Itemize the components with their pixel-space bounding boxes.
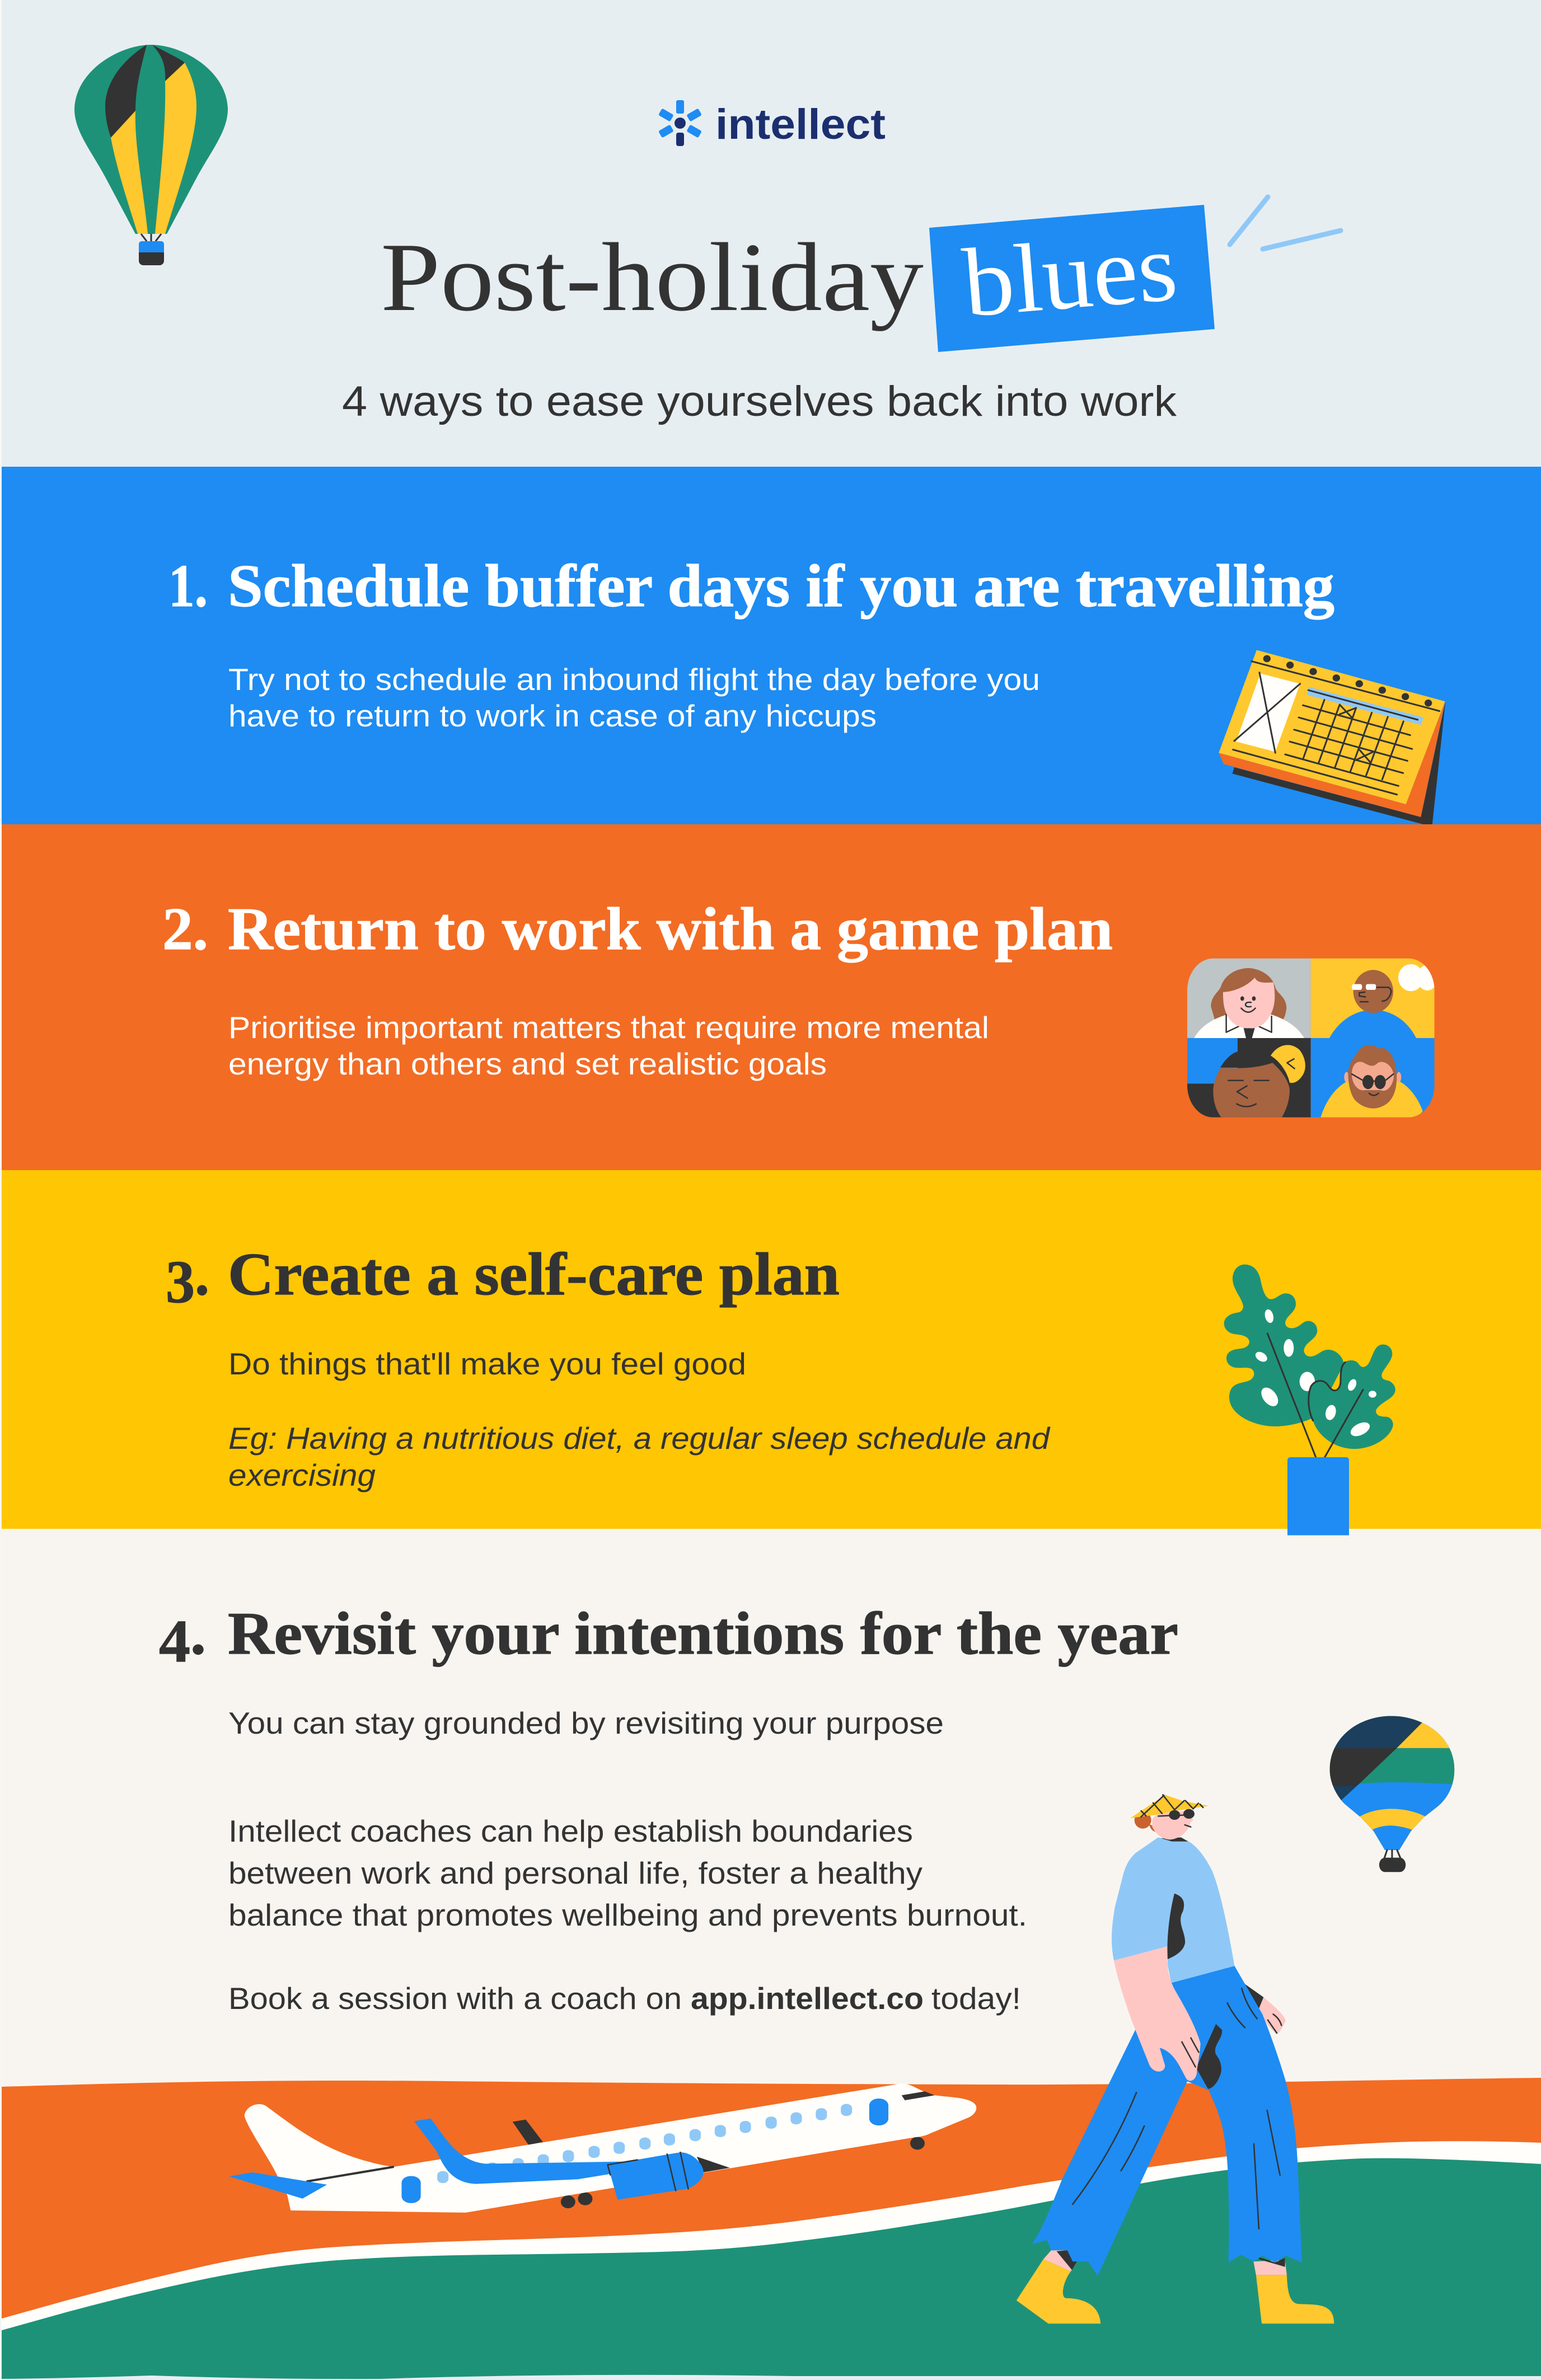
body text: step 3: Do things that'll make you feel good <box>228 1346 746 1381</box>
call to action: Book a session with a coach on <box>228 1981 682 2016</box>
panel: header <box>0 0 1541 467</box>
back hand <box>1244 1984 1286 2034</box>
heading: step 1: Schedule buffer days if you are travelling <box>228 553 1334 619</box>
title highlight: blues: blues <box>959 212 1181 337</box>
call to action: today! <box>931 1981 1021 2016</box>
heading: step 4: . <box>190 1600 206 1667</box>
pocket <box>1196 2024 1222 2089</box>
subtitle: 4 ways to ease yourselves back into work <box>342 378 1177 425</box>
person: woman <box>1194 968 1304 1038</box>
illustration: airplane <box>229 2083 976 2213</box>
title: Post-holiday <box>381 223 924 331</box>
icon: video call grid <box>1187 959 1437 1118</box>
heading: step 3: . <box>195 1241 209 1308</box>
heading: step 4: 4 <box>159 1608 190 1675</box>
landscape: green hill <box>0 2158 1541 2379</box>
body text: step 3 <box>228 1346 1051 1492</box>
panel: step 4 <box>0 1529 1541 2380</box>
heading: step 1: 1. <box>168 553 208 619</box>
call to action: app.intellect.co <box>691 1981 924 2016</box>
body text: step 4: between work and personal life, foster a healthy <box>228 1856 923 1890</box>
body text: step 2: Prioritise important matters that require more mental <box>228 1010 989 1045</box>
illustration: walking person <box>1017 1838 1334 2323</box>
body text: step 3: Eg: Having a nutritious diet, a regular sleep schedule and <box>228 1421 1051 1456</box>
person: head with hat and sunglasses <box>1130 1795 1209 1842</box>
accent strokes <box>1230 197 1341 249</box>
illustration: small balloon <box>1302 1715 1481 1872</box>
trousers <box>1032 1966 1302 2276</box>
body text: step 4: balance that promotes wellbeing and prevents burnout. <box>228 1898 1027 1932</box>
heading: step 2: Return to work with a game plan <box>228 896 1113 963</box>
panel: step 3 <box>0 1170 1541 1529</box>
person: smiling face <box>1213 1045 1305 1118</box>
call to action <box>228 1981 1021 2016</box>
landscape: orange ground <box>0 2078 1541 2380</box>
logo: intellect: intellect <box>715 101 886 148</box>
arm <box>1114 1946 1201 2081</box>
title highlight: blues <box>929 205 1215 352</box>
person: bearded man <box>1320 1045 1423 1118</box>
body text: step 3: exercising <box>228 1458 376 1492</box>
body text: step 1: Try not to schedule an inbound flight the day before you <box>228 662 1040 697</box>
back foot <box>1253 2257 1334 2323</box>
icon: striped hot air balloon <box>74 45 228 265</box>
landscape: bottom edge <box>0 2373 1541 2380</box>
body text: step 1: have to return to work in case of any hiccups <box>228 698 877 733</box>
heading: step 2: 2. <box>162 896 208 963</box>
underarm shadow <box>1167 1894 1185 1959</box>
panel: step 2 <box>0 824 1541 1170</box>
landscape: white road stripe <box>0 2141 1541 2380</box>
body text: step 2 <box>228 1010 989 1081</box>
heading: step 3: 3 <box>166 1249 195 1316</box>
body text: step 4 <box>228 1706 1027 1932</box>
heading: step 3: Create a self-care plan <box>228 1241 840 1308</box>
heading: step 4: Revisit your intentions for the year <box>228 1600 1178 1667</box>
left edge strip <box>0 0 2 2380</box>
body text: step 2: energy than others and set realistic goals <box>228 1046 827 1081</box>
panel: step 1 <box>0 467 1541 827</box>
logo: intellect <box>658 100 886 148</box>
body text: step 4: You can stay grounded by revisiting your purpose <box>228 1706 944 1740</box>
icon: calendar <box>1219 650 1445 827</box>
front foot <box>1017 2250 1100 2323</box>
shirt <box>1112 1838 1234 1983</box>
body text: step 4: Intellect coaches can help establish boundaries <box>228 1814 913 1848</box>
body text: step 1 <box>228 662 1040 733</box>
person: man with glasses <box>1329 964 1437 1038</box>
illustration: potted plant <box>1224 1265 1395 1535</box>
